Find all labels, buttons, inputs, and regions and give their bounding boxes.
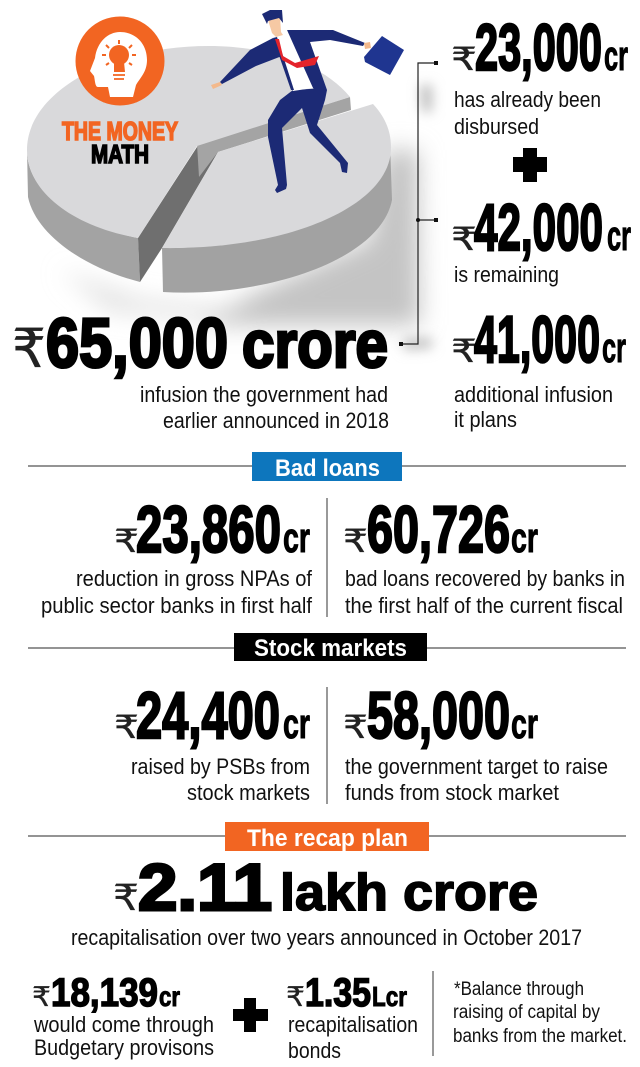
stat: 58,000 crore: cr [511, 700, 538, 747]
stat: 41,000 crore: ₹ [451, 333, 477, 369]
stat: 1.35 lakh crore [286, 971, 418, 1063]
legs [268, 88, 348, 193]
stat: 23,860 crore: reduction in gross NPAs of [76, 566, 313, 591]
stat: 23,000 crore [451, 10, 628, 139]
stat: 65,000 crore: 65,000 [46, 304, 228, 382]
rear cut face of pie [197, 97, 351, 177]
stat: 58,000 crore: ₹ [343, 709, 368, 745]
right hand [364, 42, 371, 49]
businessman jumping across the pie [211, 10, 404, 193]
footnote [453, 979, 627, 1047]
stat: 2.11 lakh crore [71, 850, 582, 950]
left pie slice side [27, 150, 140, 282]
stat: 60,726 crore: cr [511, 514, 538, 561]
stat: 1.35 lakh crore: bonds [288, 1038, 341, 1063]
stat: 2.11 lakh crore: recapitalisation over two years announced in October 2017 [71, 925, 582, 950]
dark cut face of pie [138, 147, 218, 282]
pie chart illustration with shadow [27, 46, 432, 350]
right pie slice side [162, 143, 392, 293]
stat: 58,000 crore: the government target to raise [345, 754, 608, 779]
icon: plus [233, 998, 268, 1032]
stat: 24,400 crore: raised by PSBs from [131, 754, 310, 779]
jacket and right arm [287, 30, 365, 100]
stat: 23,860 crore: 23,860 [136, 492, 281, 566]
stat: 60,726 crore [343, 492, 625, 618]
stat: 58,000 crore [343, 678, 608, 805]
stat: 24,400 crore: 24,400 [136, 678, 280, 752]
stat: 18,139 crore: cr [159, 981, 180, 1012]
hair [262, 10, 283, 24]
left pie slice top [27, 46, 350, 238]
stat: 18,139 crore [32, 971, 214, 1060]
stat: 58,000 crore: funds from stock market [345, 780, 559, 805]
shirt [277, 30, 313, 91]
stat: 60,726 crore: 60,726 [367, 492, 510, 566]
stat: 42,000 crore: ₹ [451, 221, 477, 257]
stat: 1.35 lakh crore: Lcr [372, 981, 407, 1012]
divider [326, 498, 328, 617]
stat: 2.11 lakh crore: lakh crore [280, 864, 538, 922]
bracket connector [399, 61, 438, 346]
stat: 18,139 crore: 18,139 [51, 971, 158, 1015]
stat: 23,860 crore: cr [283, 514, 310, 561]
divider [432, 971, 434, 1056]
stat: 1.35 lakh crore: 1.35 [305, 971, 371, 1015]
stat: 41,000 crore [451, 302, 626, 432]
jacket lapel [273, 37, 294, 90]
footnote: *Balance through [454, 979, 584, 1000]
stat: 65,000 crore: infusion the government had [140, 382, 388, 407]
stat: 42,000 crore: is remaining [454, 262, 559, 287]
stat: 18,139 crore: would come through [33, 1012, 214, 1037]
stat: 42,000 crore [451, 190, 631, 287]
heading: The Money Math: MATH [91, 139, 149, 169]
stat: 2.11 lakh crore: ₹ [113, 877, 139, 918]
briefcase [364, 36, 404, 75]
stat: 23,000 crore: ₹ [451, 41, 477, 77]
stat: 65,000 crore: earlier announced in 2018 [163, 408, 389, 433]
stat: 58,000 crore: 58,000 [367, 678, 510, 752]
stat: 23,860 crore: ₹ [114, 523, 139, 559]
stat: 24,400 crore: cr [283, 700, 310, 747]
stat: 23,000 crore: has already been [454, 87, 601, 112]
stat: 65,000 crore: crore [242, 307, 388, 381]
stat: 24,400 crore: stock markets [187, 780, 310, 805]
stat: 1.35 lakh crore: recapitalisation [288, 1012, 418, 1037]
right pie slice top [162, 104, 391, 248]
tie [275, 39, 319, 68]
icon: plus [513, 148, 547, 182]
section header: Bad loans: Bad loans [275, 455, 380, 482]
stat: 65,000 crore: ₹ [12, 319, 46, 379]
stat: 1.35 lakh crore: ₹ [286, 982, 305, 1012]
left arm [220, 38, 282, 84]
stat: 18,139 crore: ₹ [32, 982, 51, 1012]
icon: head with light bulb [76, 16, 164, 106]
section header: Stock markets [28, 633, 626, 662]
head [268, 17, 283, 37]
section header: Bad loans [28, 452, 626, 482]
stat: 41,000 crore: it plans [454, 407, 517, 432]
stat: 18,139 crore: Budgetary provisons [34, 1035, 214, 1060]
stat: 65,000 crore [12, 304, 389, 433]
stat: 60,726 crore: ₹ [343, 523, 368, 559]
stat: 24,400 crore [114, 678, 310, 805]
footnote: raising of capital by [453, 1002, 600, 1023]
stat: 2.11 lakh crore: 2.11 [138, 850, 272, 924]
section header: The recap plan: The recap plan [247, 825, 408, 852]
stat: 23,860 crore [41, 492, 313, 618]
divider [326, 687, 328, 804]
section header: Stock markets: Stock markets [254, 635, 407, 662]
stat: 24,400 crore: ₹ [114, 709, 139, 745]
heading: The Money Math: THE MONEY [62, 116, 178, 146]
heading: The Money Math [62, 116, 178, 169]
stat: 41,000 crore: additional infusion [454, 382, 613, 407]
stat: 23,000 crore: disbursed [454, 114, 539, 139]
section header: The recap plan [28, 822, 626, 852]
stat: 23,860 crore: public sector banks in first half [41, 593, 313, 618]
